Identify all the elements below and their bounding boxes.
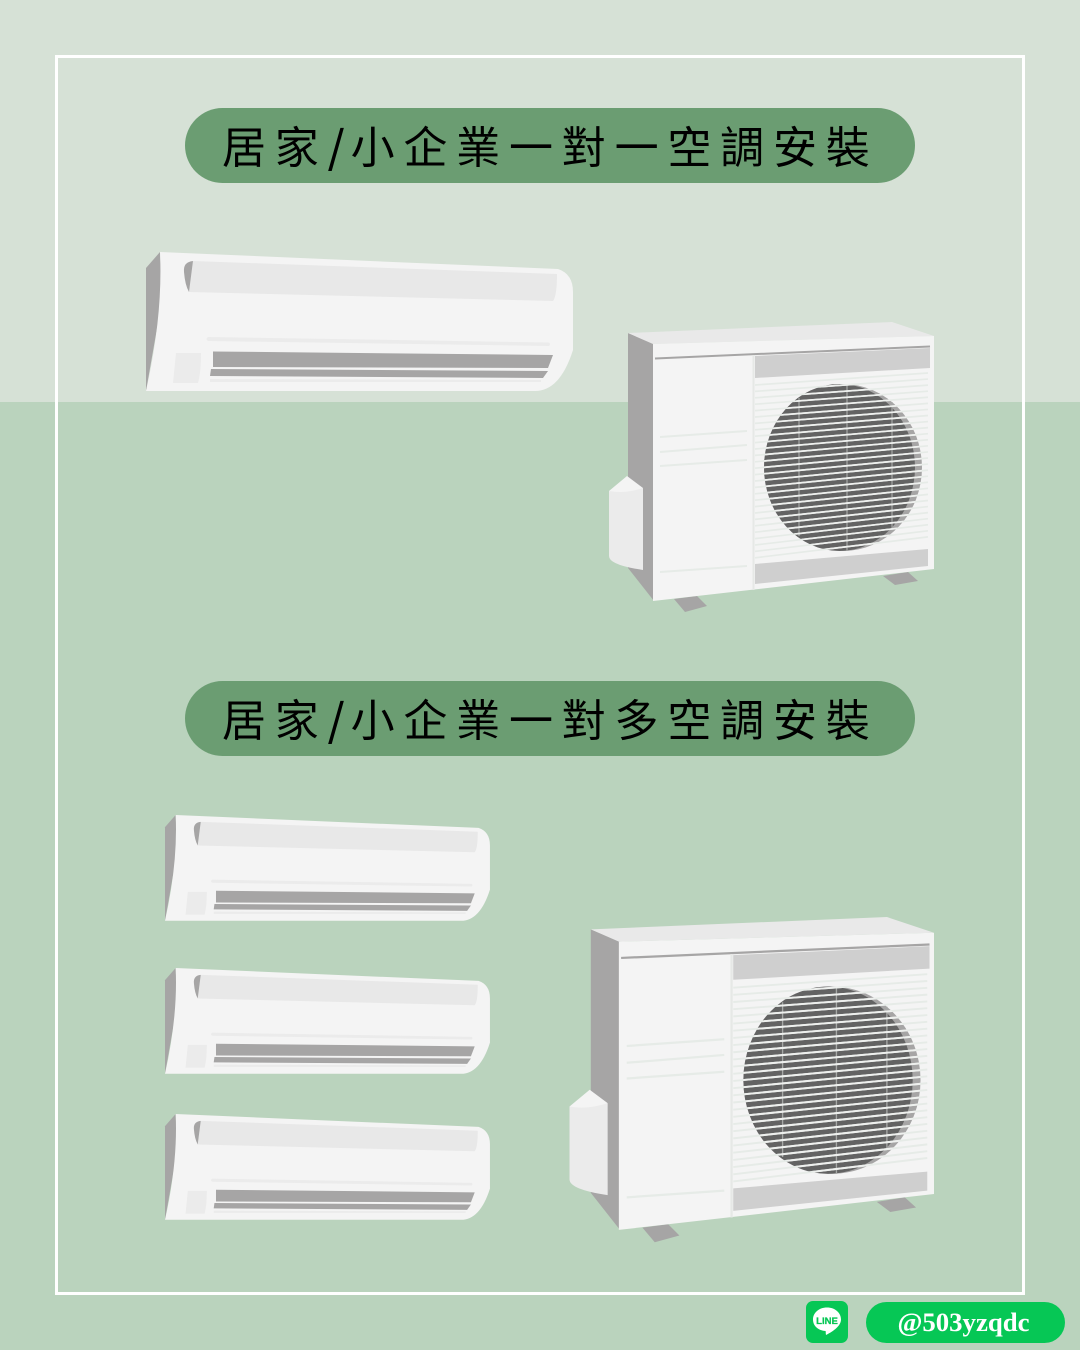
icon: LINE app: LINE	[816, 1316, 838, 1327]
outdoor unit fan	[764, 384, 922, 551]
indoor unit air outlet	[210, 352, 553, 378]
outdoor unit divider	[752, 355, 754, 590]
indoor unit body	[146, 252, 573, 391]
background: lower band	[0, 402, 1080, 1350]
outdoor unit: one-to-many	[570, 917, 934, 1242]
outdoor unit front	[653, 336, 934, 601]
outdoor unit top grey panel	[755, 348, 930, 378]
indoor unit thin groove	[206, 337, 550, 346]
heading: one-to-many installation: 居家/小企業一對多空調安裝	[222, 685, 879, 749]
heading: one-to-one installation: 居家/小企業一對一空調安裝	[222, 112, 879, 176]
outdoor unit bottom grey panel	[755, 549, 928, 584]
indoor unit lower strip	[210, 379, 541, 382]
outdoor unit side	[628, 333, 654, 601]
indoor unit: one-to-one	[146, 252, 573, 391]
indoor unit 2 of three	[165, 968, 490, 1074]
icon: LINE app	[806, 1301, 848, 1343]
outdoor unit panel lines	[660, 431, 747, 572]
outdoor unit seam line	[655, 346, 930, 358]
outdoor unit feet	[674, 572, 918, 612]
outdoor unit pipe cover	[609, 476, 643, 570]
indoor unit top panel	[189, 261, 557, 301]
outdoor unit louvers over the fan	[755, 373, 928, 558]
outdoor unit louvers	[755, 373, 928, 558]
LINE ID badge: @503yzqdc	[897, 1307, 1030, 1337]
background: upper band	[0, 0, 1080, 402]
indoor unit 1 of three	[165, 815, 490, 921]
indoor unit crescent	[184, 261, 193, 292]
LINE ID badge	[866, 1302, 1065, 1343]
outdoor unit: one-to-one	[609, 322, 934, 612]
outdoor unit top	[628, 322, 934, 344]
indoor unit 3 of three	[165, 1114, 490, 1220]
indoor unit display panel	[173, 353, 201, 383]
indoor unit side shade	[146, 252, 162, 391]
